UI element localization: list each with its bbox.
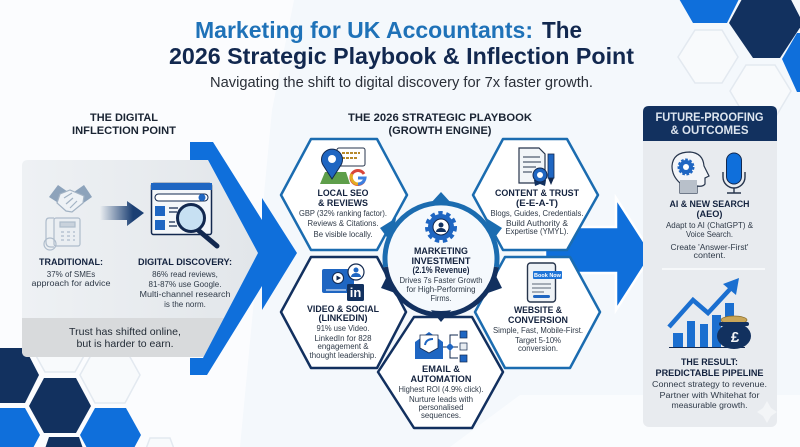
text: Be visible locally. (314, 230, 372, 239)
text: conversion. (518, 344, 558, 353)
callout strip (22, 318, 225, 357)
icon: browser with magnifier (151, 183, 217, 246)
icon: phone with booking button: Book Now (534, 273, 562, 279)
title: Marketing for UK Accountants: (195, 17, 533, 43)
text: predictable pipeline: THE RESULT: (681, 357, 738, 368)
text: LinkedIn for 828 (314, 334, 372, 343)
text: CONVERSION (508, 315, 568, 326)
text block: traditional (32, 257, 111, 288)
text (299, 188, 387, 239)
text: & REVIEWS (318, 198, 368, 209)
text: predictable pipeline: Partner with Whitehat for (660, 391, 760, 400)
panel header: & OUTCOMES (670, 125, 749, 137)
panel: content and trust (473, 139, 598, 250)
decorative hexagons: top right (678, 0, 800, 118)
decorative hexagons: bottom left (0, 318, 180, 447)
text: 91% use Video. (316, 324, 370, 333)
text: personalised (418, 403, 464, 412)
panel: local SEO (281, 139, 407, 250)
text: AI and new search: Create 'Answer-First' (670, 243, 749, 252)
icon: video and LinkedIn: in (350, 285, 361, 300)
callout: trust (69, 326, 181, 350)
text: (2.1% Revenue) (412, 265, 470, 276)
hub pointers (380, 192, 502, 322)
text (490, 188, 584, 236)
heading: playbook: (GROWTH ENGINE) (388, 125, 492, 137)
panel body (643, 106, 777, 427)
text: WEBSITE & (514, 305, 562, 316)
title: 2026 Strategic Playbook & Inflection Point (169, 43, 634, 69)
text: Drives 7s Faster Growth (400, 276, 482, 285)
text: engagement & (318, 342, 369, 351)
subtitle: Navigating the shift to digital discovery for 7x faster growth. (210, 74, 593, 91)
text (398, 364, 484, 420)
text (400, 246, 482, 303)
text: AUTOMATION (410, 374, 472, 385)
arrow: traditional to digital (100, 201, 144, 226)
text: thought leadership. (310, 351, 376, 360)
icon: document with badge (519, 148, 554, 186)
text: VIDEO & SOCIAL (307, 304, 379, 315)
panel: email and automation (378, 317, 503, 428)
sparkle mark (757, 401, 777, 423)
text block: digital discovery: DIGITAL DISCOVERY: (138, 257, 232, 268)
text: LOCAL SEO (318, 188, 368, 199)
callout: trust: Trust has shifted online, (69, 326, 181, 338)
hexagon (281, 139, 407, 250)
text: AI and new search: AI & NEW SEARCH (670, 199, 750, 210)
text: predictable pipeline: PREDICTABLE PIPELINE (656, 368, 764, 379)
panel: digital inflection point (22, 112, 258, 357)
text: MARKETING (414, 246, 468, 257)
icon: microphone (723, 153, 745, 193)
hexagon (378, 317, 503, 428)
panel background (22, 160, 258, 357)
panel: marketing investment hub (380, 192, 502, 322)
heading: playbook: THE 2026 STRATEGIC PLAYBOOK (348, 112, 532, 124)
text: (E-E-A-T) (516, 198, 558, 209)
heading: THE DIGITAL (90, 112, 158, 124)
icon: gear (428, 214, 454, 240)
panel header (643, 106, 777, 141)
text (307, 304, 379, 360)
text block: traditional: 37% of SMEs (47, 270, 95, 279)
icon: growth chart with pound pot: £ (731, 329, 740, 346)
text block: digital discovery: is the norm. (164, 300, 206, 309)
icon: growth chart with pound pot (669, 278, 751, 349)
icon: map pin and Google (320, 148, 365, 184)
text block: traditional: TRADITIONAL: (39, 257, 103, 268)
text: AI and new search: content. (694, 251, 726, 260)
text: sequences. (421, 411, 461, 420)
text: Reviews & Citations. (308, 219, 378, 228)
heading: playbook (348, 112, 532, 137)
text: Highest ROI (4.9% click). (398, 385, 484, 394)
text: AI and new search (666, 199, 754, 260)
hub circle (386, 201, 496, 311)
panel: website and conversion (475, 257, 600, 368)
callout: trust: but is harder to earn. (76, 338, 174, 350)
arrow: chevron bracket with arrow head (190, 142, 297, 375)
arrow: right flow arrow (545, 198, 652, 310)
text: Blogs, Guides, Credentials. (490, 209, 584, 218)
hexagon (281, 257, 406, 368)
text: CONTENT & TRUST (495, 188, 579, 199)
panel header: FUTURE-PROOFING (656, 112, 764, 124)
panel: video and social (281, 257, 406, 368)
title: The (542, 17, 582, 43)
text: Simple, Fast, Mobile-First. (493, 326, 583, 335)
icon: handshake (49, 185, 92, 212)
text block: digital discovery: 81-87% use Google. (149, 280, 221, 289)
panel: future-proofing and outcomes (643, 106, 777, 427)
hub ring: lower (386, 267, 496, 315)
text: AI and new search: (AEO) (696, 209, 722, 220)
text block: traditional: approach for advice (32, 279, 111, 288)
text: (LINKEDIN) (318, 313, 368, 324)
heading (72, 112, 176, 137)
text: INVESTMENT (412, 256, 471, 267)
text: predictable pipeline: Connect strategy to revenue. (652, 380, 767, 389)
text block: digital discovery: 86% read reviews, (152, 270, 218, 279)
icon: telephone (44, 218, 80, 250)
text (493, 305, 583, 353)
text block: digital discovery (138, 257, 232, 309)
text: GBP (32% ranking factor). (299, 209, 387, 218)
text: Expertise (YMYL). (506, 227, 568, 236)
hexagon (473, 139, 598, 250)
hexagon (475, 257, 600, 368)
icon: envelope with automation flow (415, 331, 467, 362)
icon: AI head (672, 152, 709, 193)
text: AI and new search: Voice Search. (686, 230, 733, 239)
text: for High-Performing (406, 285, 476, 294)
text: Firms. (430, 294, 452, 303)
text: predictable pipeline (652, 357, 767, 410)
text block: digital discovery: Multi-channel research (140, 290, 230, 299)
hub ring: upper (385, 203, 497, 267)
text: Target 5-10% (515, 336, 561, 345)
text: EMAIL & (422, 364, 460, 375)
text: predictable pipeline: measurable growth. (672, 401, 748, 410)
text: Nurture leads with (409, 395, 473, 404)
heading: INFLECTION POINT (72, 125, 176, 137)
text: AI and new search: Adapt to AI (ChatGPT) & (666, 221, 754, 230)
text: Build Authority & (506, 219, 569, 228)
title (169, 17, 634, 69)
